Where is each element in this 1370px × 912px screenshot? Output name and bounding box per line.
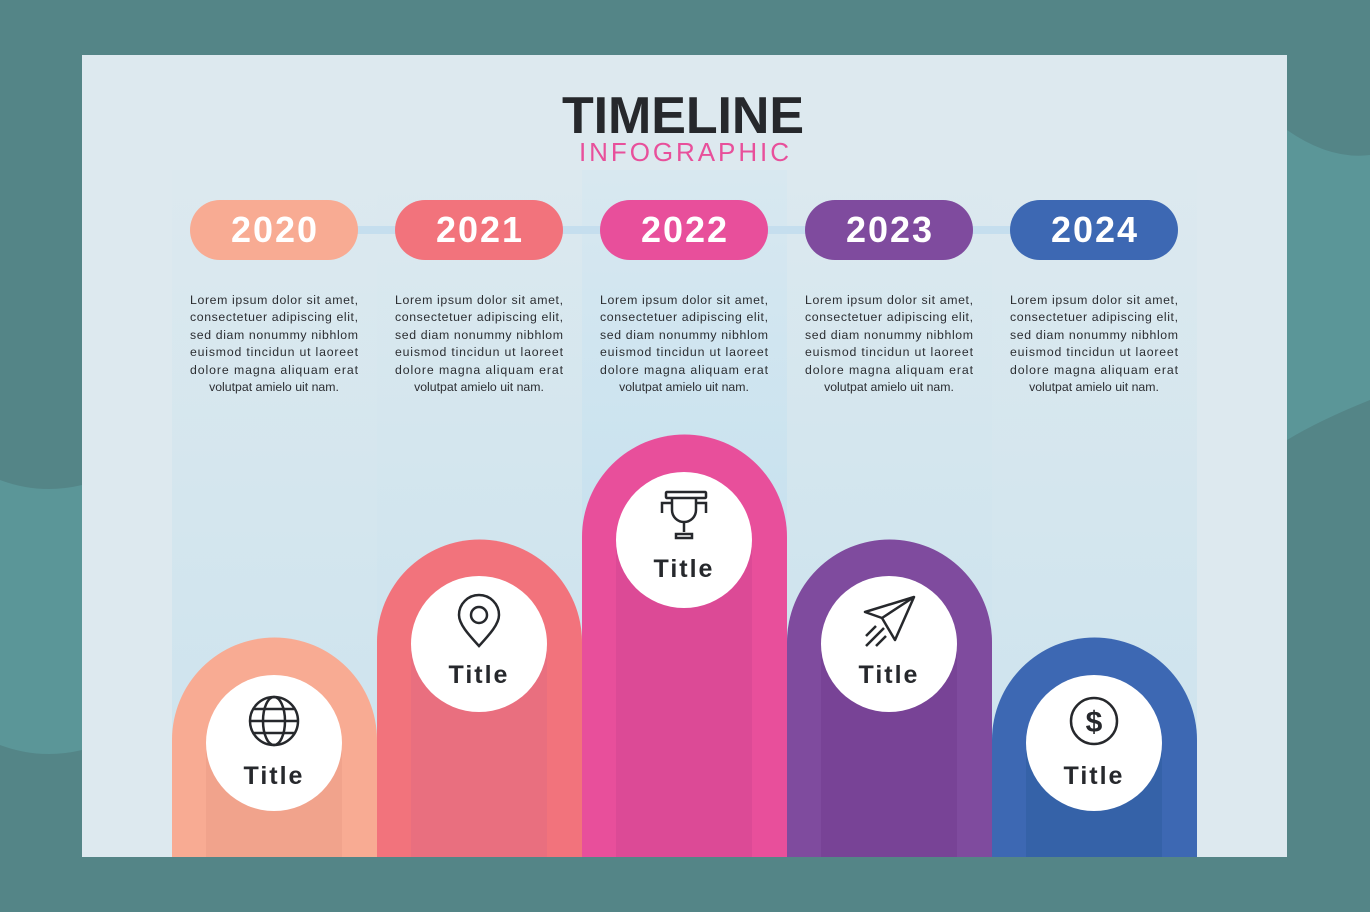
arch 2020: Title <box>244 762 304 790</box>
text blocks <box>190 293 1179 394</box>
year pills: 2020 <box>231 209 319 250</box>
year pills: 2022 <box>641 209 729 250</box>
title: TIMELINE <box>562 87 806 145</box>
column backgrounds <box>172 170 1197 857</box>
arch 2023: Title <box>859 661 919 689</box>
background blobs <box>0 130 1370 754</box>
arch 2021: Title <box>449 661 509 689</box>
arch 2024: Title <box>1064 762 1124 790</box>
year pills <box>190 200 1178 260</box>
connector line <box>274 226 1094 234</box>
card <box>82 55 1287 857</box>
arch 2022: Title <box>654 555 714 583</box>
arch 2020 <box>172 638 377 857</box>
arch 2024: $ <box>1086 706 1103 739</box>
arch 2023 <box>787 540 992 857</box>
year pills: 2021 <box>436 209 524 250</box>
year pills: 2024 <box>1051 209 1139 250</box>
year pills: 2023 <box>846 209 934 250</box>
arch 2021 <box>377 540 582 857</box>
title: INFOGRAPHIC <box>579 137 793 167</box>
arch 2024 <box>992 638 1197 857</box>
arch 2022 <box>582 434 787 857</box>
